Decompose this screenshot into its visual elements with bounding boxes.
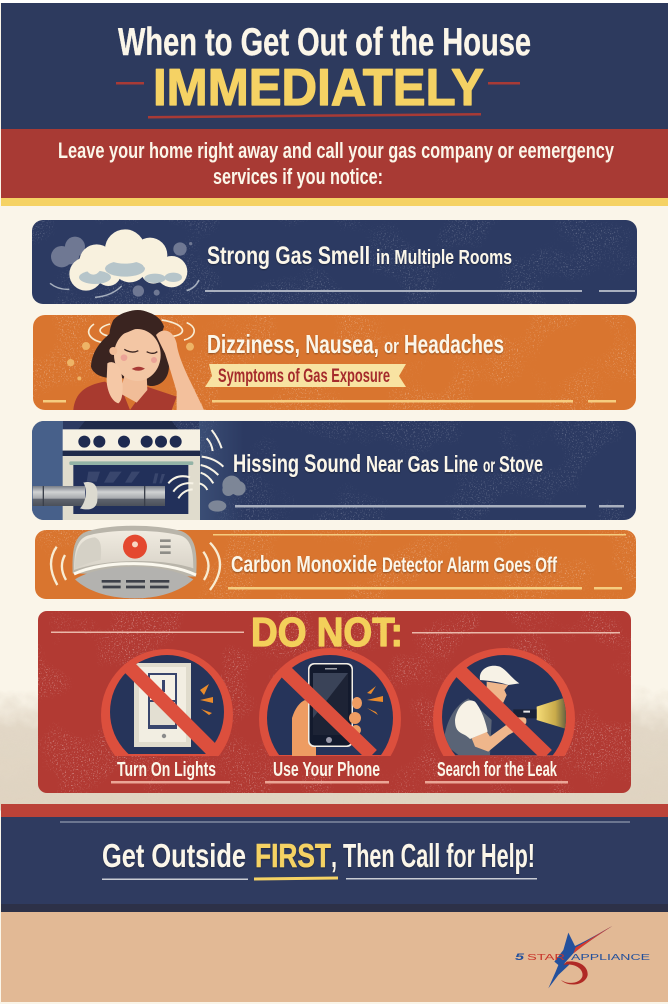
text: carbon monoxide [231,551,558,577]
label: search for the leak: Search for the Leak [437,759,558,781]
label: use your phone: Use Your Phone [273,759,380,781]
text: strong gas smell [207,242,512,270]
icon: stove with gas pipe [33,421,246,520]
footer band [1,804,668,912]
logo: 5 star appliance [515,926,650,988]
panel: hissing sound [32,421,636,520]
panel: do not [38,609,631,793]
text: hissing sound: or [483,456,495,477]
text: strong gas smell: Strong Gas Smell [207,242,370,270]
call to action [102,837,535,874]
prohibited: turn on lights [101,649,233,756]
panel: strong gas smell [32,220,637,304]
title emphasis: IMMEDIATELY: IMMEDIATELY [153,59,484,117]
logo: 5 star appliance: 5 [515,952,526,962]
text: strong gas smell: in Multiple Rooms [376,247,512,269]
heading: do not: DO NOT: [251,609,403,655]
banner: symptoms of gas exposure [205,364,406,387]
title line 1: When to Get Out of the House [118,21,531,64]
panel: dizziness [33,310,636,410]
call to action: Then Call for Help! [343,837,535,874]
subtitle text: services if you notice: [213,164,383,189]
panel: carbon monoxide alarm [35,526,636,599]
prohibited: use your phone [259,648,401,756]
icon: smoke detector [51,526,220,598]
call to action: Get Outside [102,837,246,874]
icon: gas cloud [50,229,199,297]
logo: 5 star appliance: STAR [527,953,565,962]
red subtitle band [1,129,668,206]
text: hissing sound [233,450,543,478]
header band: title [1,3,668,129]
text: hissing sound: Hissing Sound [233,450,361,478]
text: carbon monoxide: Detector Alarm Goes Off [382,554,558,577]
text: dizziness heading: Dizziness, Nausea, [207,329,379,359]
banner: symptoms of gas exposure: Symptoms of Gas Exposure [218,366,390,387]
icon: dizzy woman [67,310,204,410]
logo: 5 star appliance: APPLIANCE [571,953,650,962]
text: hissing sound: Stove [499,451,543,477]
text: hissing sound: Near Gas Line [366,451,478,477]
prohibited: search for the leak [433,648,575,756]
footer peach band [1,912,668,1002]
label: turn on lights: Turn On Lights [117,759,216,781]
text: dizziness heading: or [384,336,399,358]
call to action: , [331,837,337,874]
subtitle text [58,138,615,189]
text: carbon monoxide: Carbon Monoxide [231,551,377,577]
text: dizziness heading: Headaches [404,329,504,359]
call to action: FIRST [255,837,331,874]
